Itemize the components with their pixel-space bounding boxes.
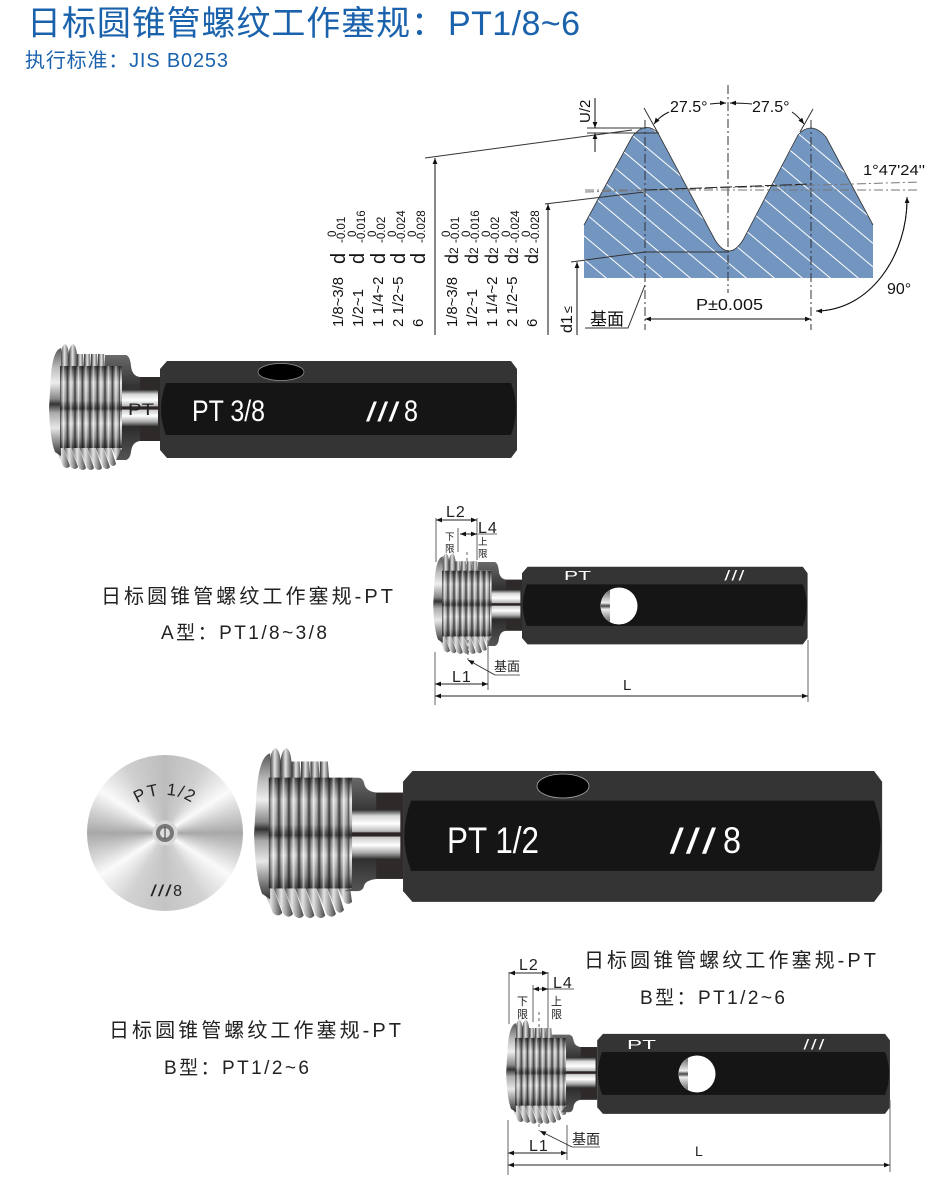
tolerance table: d: -0.02	[376, 217, 388, 243]
tolerance table: d2: -0.024	[510, 210, 522, 243]
tolerance table: d2: 0	[501, 231, 513, 237]
caption: type B right: 日标圆锥管螺纹工作塞规-PT	[584, 949, 876, 972]
tolerance table: d2: -0.016	[470, 210, 482, 243]
thread profile diagram	[425, 85, 925, 335]
tolerance table: d2: -0.028	[530, 210, 542, 243]
tolerance table: d: d	[408, 253, 430, 264]
tolerance table: d	[327, 210, 430, 327]
caption: type B right	[584, 949, 876, 1009]
subtitle: standard: 执行标准：JIS B0253	[25, 49, 228, 72]
tolerance table: d2: 1/2~1	[464, 289, 481, 327]
dimensions: type B: 基面	[572, 1131, 600, 1147]
caption: type A	[101, 585, 393, 644]
tolerance table: d2: 0	[481, 231, 493, 237]
tolerance table: d: 0	[367, 231, 379, 237]
tolerance table: d: 1/8~3/8	[330, 277, 347, 327]
plug gauge photo: PT 3/8: ///	[366, 397, 399, 427]
dimensions: type A: 上	[478, 537, 488, 548]
title: PT1/8~6	[448, 5, 580, 43]
tolerance table: d2: 0	[441, 231, 453, 237]
title: 日标圆锥管螺纹工作塞规：	[27, 5, 445, 43]
plug gauge photo: PT 3/8: 8	[404, 395, 418, 428]
plug gauge photo: PT 3/8: PT 3/8	[192, 395, 265, 428]
tolerance table: d2: d2	[522, 247, 542, 264]
dimensions: type B: L4	[553, 975, 573, 992]
dimensions: type B: L1	[529, 1138, 549, 1155]
disc engraving: size: PT 1/2	[133, 784, 195, 802]
disc centre hole	[152, 820, 178, 846]
dimensions: type A: 限	[478, 549, 488, 560]
tolerance table: d: 0	[347, 231, 359, 237]
plug gauge photo: PT 3/8: PT	[128, 400, 154, 419]
tolerance table: d: 0	[407, 231, 419, 237]
taper angle label: 1°47'24''	[863, 162, 925, 179]
plug gauge photo: PT 1/2: PT 1/2	[447, 820, 539, 861]
caption: type B left: 日标圆锥管螺纹工作塞规-PT	[109, 1019, 401, 1042]
tolerance table: d2: d2	[462, 247, 482, 264]
U/2 label: U/2	[577, 100, 594, 123]
angle label left: 27.5°	[670, 99, 708, 116]
plug gauge photo: PT 3/8	[49, 344, 517, 470]
dimensions: type A: 限	[445, 544, 455, 555]
tolerance table: d: 0	[327, 231, 339, 237]
tolerance table: d: 6	[410, 319, 427, 327]
tolerance table: d2: d2	[502, 247, 522, 264]
dimensions: type A: L	[623, 677, 631, 694]
tolerance table: d2: d2	[482, 247, 502, 264]
dimensions: type A: L4	[478, 520, 498, 537]
tolerance table: d2: -0.02	[490, 217, 502, 243]
tolerance table: d2: 6	[524, 319, 541, 327]
plug gauge drawing: type A: PT	[564, 569, 592, 583]
tolerance table: d2: -0.01	[450, 217, 462, 243]
tolerance table: d: d	[368, 253, 390, 264]
pitch label: P±0.005	[696, 297, 763, 314]
tolerance table: d2: 0	[521, 231, 533, 237]
dimensions: type A: L1	[452, 669, 472, 686]
tolerance table: d: -0.016	[356, 210, 368, 243]
dimensions: type B: 下	[517, 996, 528, 1008]
90 degree label: 90°	[887, 281, 911, 298]
d1 label: d1≤	[559, 306, 576, 333]
dimensions: type A: 下	[445, 532, 455, 543]
plug gauge drawing: type A: ///	[724, 567, 745, 583]
plug gauge drawing: type A	[433, 553, 808, 654]
tolerance table: d: d	[388, 253, 410, 264]
tolerance table: d: -0.024	[396, 210, 408, 243]
tolerance table: d: -0.01	[336, 217, 348, 243]
tolerance table: d2: 1 1/4~2	[484, 277, 501, 327]
plug gauge photo: PT 1/2	[254, 748, 882, 918]
thread section with hatching	[584, 120, 874, 278]
dimensions: type A: L2	[446, 504, 466, 521]
plug gauge drawing: type B	[506, 1020, 890, 1124]
caption: type B left: B型：PT1/2~6	[164, 1057, 309, 1079]
tolerance table: d: -0.028	[416, 210, 428, 243]
end-face disc	[87, 755, 243, 911]
dimensions: type A: 基面	[494, 659, 520, 674]
disc engraving: mark: ///8	[150, 883, 182, 900]
tolerance table: d2: 1/8~3/8	[444, 277, 461, 327]
caption: type B right: B型：PT1/2~6	[640, 987, 785, 1009]
plug gauge photo: PT 1/2: 8	[723, 820, 741, 861]
caption: type B left	[109, 1019, 401, 1079]
tolerance table: d2	[441, 210, 542, 327]
dimensions: type B: 限	[551, 1008, 562, 1021]
angle label right: 27.5°	[752, 99, 790, 116]
dimensions: type B: L2	[519, 957, 539, 974]
dimensions: type B: L	[695, 1143, 703, 1159]
tolerance table: d: d	[328, 253, 350, 264]
dimensions: type B: 限	[517, 1008, 528, 1021]
caption: type A: A型：PT1/8~3/8	[161, 622, 327, 644]
plug gauge drawing: type B: ///	[803, 1036, 825, 1052]
dimensions: type B	[508, 957, 890, 1175]
tolerance table: d2: 2 1/2~5	[504, 277, 521, 327]
tolerance table: d: 2 1/2~5	[390, 277, 407, 327]
tolerance table: d: d	[347, 253, 369, 264]
dimensions: type B: 上	[551, 995, 562, 1008]
plug gauge photo: PT 1/2: ///	[669, 822, 716, 861]
caption: type A: 日标圆锥管螺纹工作塞规-PT	[101, 585, 393, 608]
tolerance table: d: 1/2~1	[350, 289, 367, 327]
dimensions: type A	[435, 504, 808, 705]
tolerance table: d: 1 1/4~2	[370, 277, 387, 327]
datum plane label: 基面	[590, 310, 624, 329]
tolerance table: d2: d2	[442, 247, 462, 264]
tolerance table: d: 0	[387, 231, 399, 237]
plug gauge drawing: type B: PT	[627, 1037, 656, 1052]
tolerance table: d2: 0	[461, 231, 473, 237]
